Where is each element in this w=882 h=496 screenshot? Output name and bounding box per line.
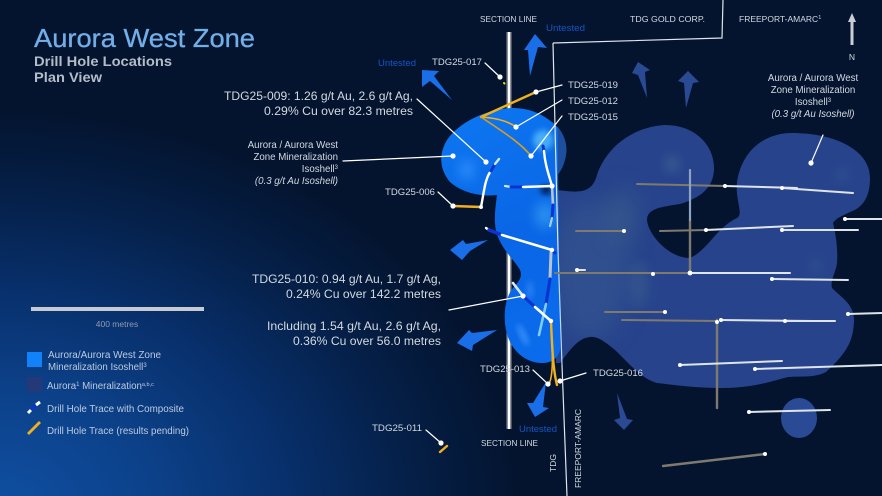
text: TDG25-009 assay callout: TDG25-009: 1.26 g/t Au, 2.6 g/t Ag, xyxy=(224,89,413,103)
legend: Aurora mineralization swatch: Aurora xyxy=(47,381,76,392)
text: section line labels xyxy=(480,14,538,448)
text: isoshell label right: Aurora / Aurora West xyxy=(768,73,858,84)
text: isoshell label left: Isoshell xyxy=(302,164,335,175)
text: TDG25-009 assay callout xyxy=(224,89,413,118)
text: property labels: TDG xyxy=(548,454,558,472)
text: drill hole labels: TDG25-006 xyxy=(385,187,435,198)
text: isoshell label left: 3 xyxy=(335,165,339,171)
text: drill hole labels: TDG25-019 xyxy=(568,80,618,91)
text: isoshell label left: Aurora / Aurora West xyxy=(248,140,338,151)
text: isoshell label right: 3 xyxy=(828,98,832,104)
text: TDG25-009 assay callout: 0.29% Cu over 82.3 metres xyxy=(264,104,413,118)
panel: Aurora dark mineralization shell xyxy=(550,125,870,438)
title: Aurora West Zone xyxy=(34,23,255,53)
text: untested labels: Untested xyxy=(378,58,416,69)
text: drill hole labels: TDG25-016 xyxy=(593,368,643,379)
legend: results pending trace: Drill Hole Trace (results pending) xyxy=(47,426,189,437)
callout leader lines xyxy=(343,63,823,443)
callout leader dots xyxy=(438,74,814,446)
property boundary xyxy=(553,0,723,496)
text: property labels: TDG GOLD CORP. xyxy=(630,14,705,24)
text: drill hole labels: TDG25-015 xyxy=(568,112,618,123)
text: property labels: FREEPORT-AMARC xyxy=(739,14,818,24)
scale bar: 400 metres xyxy=(96,319,138,329)
legend: isoshell swatch xyxy=(27,350,161,373)
legend: Aurora mineralization swatch xyxy=(27,377,154,392)
text: isoshell label left: Zone Mineralization xyxy=(253,152,338,163)
subtitle xyxy=(34,53,172,85)
text: drill hole labels: TDG25-017 xyxy=(432,57,482,68)
text: section line labels: SECTION LINE xyxy=(481,438,538,448)
legend: isoshell swatch: Mineralization Isoshell xyxy=(48,362,143,373)
text: property labels: FREEPORT-AMARC xyxy=(573,409,583,488)
text: untested labels: Untested xyxy=(519,424,557,435)
text: drill hole labels: TDG25-013 xyxy=(480,364,530,375)
text: TDG25-010 assay callout: TDG25-010: 0.94 g/t Au, 1.7 g/t Ag, xyxy=(252,272,441,286)
drill hole traces results pending xyxy=(440,83,557,452)
text: isoshell label left: (0.3 g/t Au Isoshell) xyxy=(255,176,338,187)
legend: Aurora mineralization swatch: 1 xyxy=(76,382,80,388)
scale bar xyxy=(31,307,204,329)
neighbouring drill holes xyxy=(555,170,882,466)
legend: Aurora mineralization swatch: a,b,c xyxy=(142,382,154,388)
legend: isoshell swatch: Aurora/Aurora West Zone xyxy=(48,350,161,361)
panel: muted isoshell beyond boundary xyxy=(552,122,566,180)
text: property labels: 1 xyxy=(818,15,821,21)
icon: north arrow xyxy=(848,13,856,62)
text: TDG25-010 assay callout xyxy=(252,272,441,348)
text: isoshell label right: Zone Mineralization xyxy=(771,85,855,96)
subtitle: Plan View xyxy=(34,69,102,85)
text: property labels xyxy=(548,14,821,488)
text: untested labels: Untested xyxy=(546,23,585,34)
text: TDG25-010 assay callout: Including 1.54 g/t Au, 2.6 g/t Ag, xyxy=(267,319,441,333)
neighbouring drill hole collars xyxy=(575,184,850,456)
text: isoshell label right: Isoshell xyxy=(795,97,828,108)
legend: composite trace: Drill Hole Trace with Composite xyxy=(47,404,184,415)
text: isoshell label left xyxy=(248,140,339,187)
text: TDG25-010 assay callout: 0.24% Cu over 142.2 metres xyxy=(286,287,441,301)
text: drill hole labels: TDG25-012 xyxy=(568,96,618,107)
legend: isoshell swatch: 3 xyxy=(143,363,147,369)
panel: Aurora West bright isoshell xyxy=(441,108,567,363)
arrows: bright blue untested directions xyxy=(422,34,549,417)
drill hole traces with composites xyxy=(481,146,555,335)
text: drill hole labels: TDG25-011 xyxy=(372,423,422,434)
section line xyxy=(506,32,512,429)
text: isoshell label right xyxy=(768,73,858,120)
text: TDG25-010 assay callout: 0.36% Cu over 56.0 metres xyxy=(293,334,441,348)
icon: north arrow: N xyxy=(849,52,855,62)
arrows: dark blue untested directions xyxy=(614,62,699,430)
text: section line labels: SECTION LINE xyxy=(480,14,537,24)
subtitle: Drill Hole Locations xyxy=(34,53,172,69)
text: drill hole labels xyxy=(372,57,643,434)
text: isoshell label right: (0.3 g/t Au Isoshell) xyxy=(771,109,855,120)
legend: Aurora mineralization swatch: Mineralization xyxy=(79,381,142,392)
legend: results pending trace xyxy=(28,422,189,437)
legend xyxy=(27,350,189,437)
text: untested labels xyxy=(378,23,585,435)
